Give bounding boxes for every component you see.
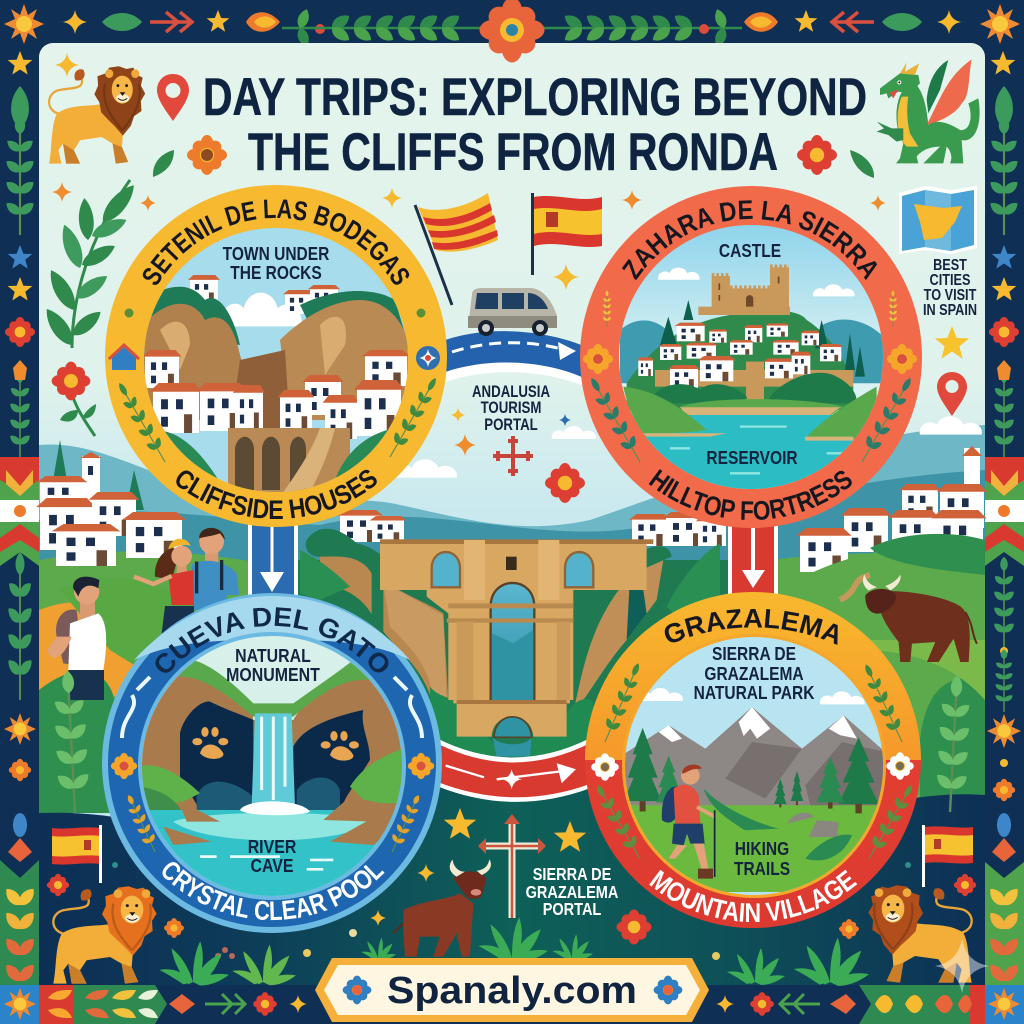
right hill town (780, 446, 987, 640)
icon: dragon (877, 59, 980, 163)
icon: map pin right (937, 372, 967, 416)
scene caption river cave (248, 836, 297, 876)
label: Sierra de Grazalema Portal (526, 865, 619, 919)
icon: Spanish flag on pole (531, 193, 602, 275)
arrow: road from Setenil to Zahara (440, 331, 584, 386)
icon: Spanish flag lower right (922, 825, 973, 887)
icon: bull right (863, 575, 977, 662)
scene caption (223, 244, 329, 283)
hillside solo traveller (47, 577, 106, 700)
border: top decorative band (63, 7, 961, 49)
ring footer: CLIFFSIDE HOUSES (176, 470, 377, 519)
ring heading: CUEVA DEL GATO (155, 607, 388, 673)
scene caption: THE ROCKS (230, 263, 322, 283)
hillside couple (134, 528, 239, 633)
scene caption river cave: RIVER (248, 836, 297, 857)
ring flowers (591, 752, 914, 781)
icon: map pin by title (157, 74, 189, 121)
middle village left of bridge (337, 510, 406, 542)
top centre flower (480, 0, 544, 63)
arrow: Zahara to Grazalema (728, 505, 778, 605)
middle village right of bridge (629, 512, 728, 546)
ring water splashes (122, 677, 422, 738)
icon: lion bottom left (53, 886, 157, 984)
border: left decorative band (0, 4, 44, 1024)
central decoration: cross, flower, sparks (395, 408, 982, 503)
label: Sierra de Grazalema Portal: SIERRA DE (533, 865, 612, 884)
icon: lion top left (49, 66, 145, 164)
banner: Spanaly.com (315, 958, 709, 1022)
scene caption park: NATURAL PARK (694, 683, 815, 703)
scene caption hiking (734, 839, 790, 879)
scene caption park (694, 644, 815, 703)
scene caption reservoir: RESERVOIR (706, 448, 798, 468)
flower with stem, left (52, 362, 96, 436)
icon: cross (478, 814, 546, 918)
plants along the bottom (159, 917, 869, 986)
ring footer: HILLTOP FORTRESS (648, 469, 852, 520)
ring footer: CRYSTAL CLEAR POOL (162, 862, 384, 920)
ring heading: ZAHARA DE LA SIERRA (622, 200, 878, 280)
label: Sierra de Grazalema Portal: GRAZALEMA (526, 883, 619, 902)
ring sprigs and laurels (583, 291, 919, 467)
medallion: Zahara de la Sierra (580, 186, 922, 528)
Ronda cliffs (300, 529, 720, 757)
label: best cities: CITIES (930, 272, 970, 289)
foliage: right plant (932, 674, 975, 813)
flags, stars and flowers lower area (47, 808, 976, 960)
medallion: Setenil de las Bodegas (105, 185, 447, 527)
scene caption monument (226, 645, 320, 685)
medallion: Cueva del Gato (102, 593, 442, 933)
scene caption park: GRAZALEMA (704, 664, 804, 684)
scene caption hiking: HIKING (735, 839, 789, 859)
left hill town (36, 440, 186, 566)
border: right decorative band (980, 4, 1024, 1024)
label: Sierra de Grazalema Portal: PORTAL (543, 900, 601, 919)
label: best cities: TO VISIT (924, 287, 977, 304)
icon: van (468, 288, 557, 336)
ring laurels (121, 792, 426, 855)
ring heading: GRAZALEMA (664, 609, 838, 645)
label: best cities: BEST (933, 257, 967, 274)
scene caption river cave: CAVE (250, 855, 294, 876)
arrow: Setenil to Cueva (248, 505, 298, 605)
label: Andalusia Tourism Portal: TOURISM (481, 399, 541, 417)
ring heading: SETENIL DE LAS BODEGAS (142, 200, 410, 285)
ring icons (109, 308, 440, 370)
title: THE CLIFFS FROM RONDA (248, 123, 778, 182)
label: best cities: IN SPAIN (923, 302, 977, 319)
icon: lion bottom right (868, 885, 972, 983)
label: best cities (923, 257, 977, 319)
ring laurels (589, 660, 920, 863)
scene caption monument: MONUMENT (226, 664, 320, 685)
banner: Spanaly.com: Spanaly.com (387, 970, 637, 1012)
decorative flowers and sparks near title, left (52, 53, 227, 211)
scene caption castle: CASTLE (719, 241, 781, 261)
ring footer: MOUNTAIN VILLAGE (649, 870, 858, 922)
arrow: Cueva to Grazalema (437, 738, 590, 802)
icon: map of Spain (899, 186, 977, 254)
decorative flowers right of title (382, 135, 886, 290)
border: bottom decorative band (39, 985, 985, 1024)
ring flowers (583, 344, 917, 374)
icon: star (935, 326, 969, 359)
label: Andalusia Tourism Portal (472, 383, 550, 434)
label: Andalusia Tourism Portal: ANDALUSIA (472, 383, 550, 401)
watermark sparkle (935, 939, 989, 993)
ring flowers (111, 753, 434, 779)
icon: striped regional flag (415, 193, 498, 305)
scene caption: TOWN UNDER (223, 244, 329, 264)
scene caption park: SIERRA DE (712, 644, 796, 664)
icon: bull bottom (393, 859, 491, 957)
plant left (40, 180, 140, 350)
foliage: left plant (49, 670, 94, 814)
scene caption hiking: TRAILS (734, 859, 790, 879)
scene caption monument: NATURAL (235, 645, 311, 666)
medallion: Grazalema (585, 592, 921, 928)
ring laurels (112, 374, 443, 466)
title (203, 68, 867, 182)
label: Andalusia Tourism Portal: PORTAL (484, 416, 538, 434)
Ronda bridge (Puente Nuevo) (380, 539, 653, 757)
